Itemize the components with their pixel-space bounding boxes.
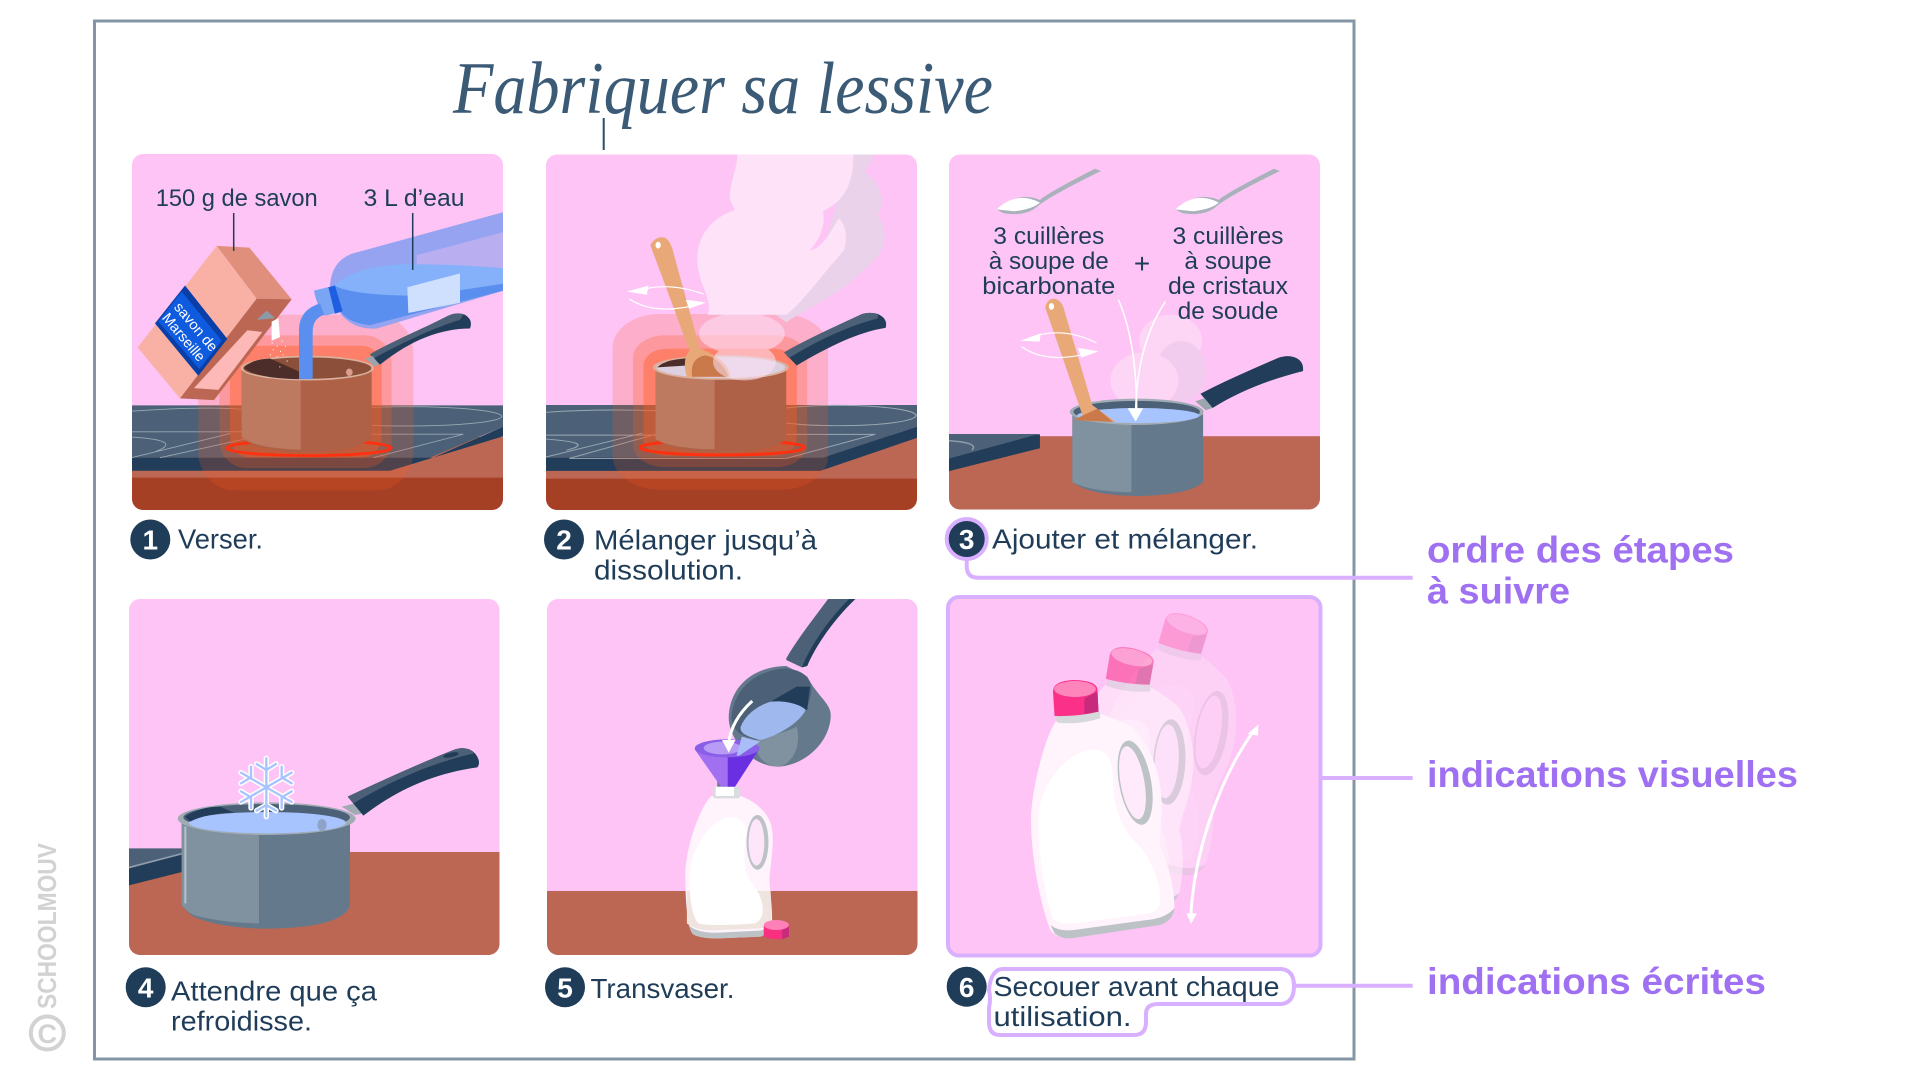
saucepan: grey <box>1070 356 1303 496</box>
watermark: SCHOOLMOUV <box>31 843 64 1050</box>
worktop and hob <box>946 434 1322 511</box>
legend: ordre des etapes: ordre des étapes <box>1427 530 1734 571</box>
label: 150 g de savon: 150 g de savon <box>156 185 318 212</box>
label: bicarbonate: 3 cuillères <box>993 223 1104 250</box>
heat halos <box>198 315 413 490</box>
worktop <box>543 891 922 958</box>
icon: snowflake <box>241 758 292 817</box>
step 3 caption with highlight <box>947 519 1413 578</box>
legend: ordre des etapes <box>1427 530 1734 611</box>
box label text: Marseille <box>158 310 208 365</box>
converging arrows <box>1118 300 1165 420</box>
step 1 caption <box>130 520 263 560</box>
step 1 caption: Verser. <box>178 524 263 554</box>
label: 3 L d'eau: 3 L d’eau <box>364 185 464 212</box>
title: Fabriquer sa lessive <box>452 48 993 130</box>
hob ring <box>227 440 391 456</box>
label: cristaux de soude: 3 cuillères <box>1172 223 1284 250</box>
worktop and hob <box>540 405 922 514</box>
arrow <box>722 701 752 753</box>
plus sign: + <box>1134 248 1150 279</box>
box label text: savon de <box>170 300 220 355</box>
bottle of water <box>314 212 503 329</box>
step 2 caption: Mélanger jusqu’à <box>594 524 817 556</box>
saucepan: copper <box>653 313 886 453</box>
box of soap <box>138 246 292 400</box>
wooden spoon <box>1045 299 1116 422</box>
step 2 caption: 2 <box>556 524 572 556</box>
step 2 caption <box>544 520 817 586</box>
label: cristaux de soude: de soude <box>1178 298 1278 325</box>
step 5 caption <box>545 967 734 1007</box>
step 2 caption: dissolution. <box>594 554 743 586</box>
panel: step 2 <box>540 154 922 514</box>
step 6 caption with highlight: utilisation. <box>994 1001 1132 1032</box>
label: cristaux de soude: de cristaux <box>1168 273 1288 300</box>
front bottle <box>1031 680 1174 938</box>
legend: indications ecrites: indications écrites <box>1427 961 1766 1002</box>
rotation arrows <box>1022 333 1096 358</box>
label: bicarbonate: à soupe de <box>989 248 1109 275</box>
step 4 caption <box>126 967 377 1036</box>
cap <box>764 920 789 939</box>
step 1 caption: 1 <box>143 524 158 556</box>
steam <box>697 154 885 381</box>
label: bicarbonate: bicarbonate <box>982 273 1115 300</box>
label: cristaux de soude <box>1168 223 1288 325</box>
step 5 caption: Transvaser. <box>590 973 734 1004</box>
double arrow <box>1186 724 1259 924</box>
step 3 caption with highlight: Ajouter et mélanger. <box>992 524 1258 554</box>
heat halos <box>613 314 828 490</box>
saucepan: copper <box>241 313 471 452</box>
label: 3 L d'eau <box>364 185 464 270</box>
label: bicarbonate <box>982 223 1115 300</box>
worktop and hob <box>130 405 507 516</box>
box label text <box>162 304 216 361</box>
watermark: SCHOOLMOUV: C <box>38 1019 57 1049</box>
middle bottle <box>1098 647 1194 901</box>
wooden spoon <box>650 237 730 377</box>
label: cristaux de soude: à soupe <box>1184 248 1272 275</box>
hob ring <box>640 440 805 455</box>
panel: step 6 <box>948 597 1320 956</box>
step 6 caption with highlight <box>947 967 1413 1035</box>
saucepan: grey <box>178 748 479 929</box>
panel: step 3 <box>946 154 1322 511</box>
step 5 caption: 5 <box>557 972 573 1004</box>
panel: step 5 <box>543 599 922 958</box>
step 4 caption: Attendre que ça <box>171 976 377 1006</box>
legend: indications visuelles: indications visuelles <box>1427 754 1798 795</box>
step 4 caption: refroidisse. <box>171 1006 312 1036</box>
outer frame <box>94 21 1354 1059</box>
funnel <box>695 737 760 787</box>
panel: step 4 <box>127 599 502 957</box>
bottle <box>685 780 773 938</box>
steam <box>1111 315 1206 409</box>
worktop and hob <box>127 848 502 957</box>
step 6 caption with highlight: 6 <box>959 972 974 1003</box>
step 3 caption with highlight: 3 <box>959 524 974 555</box>
rotation arrows <box>629 287 704 309</box>
saucepan pouring <box>729 599 855 767</box>
spoons <box>997 169 1280 214</box>
back bottle <box>1150 613 1236 876</box>
legend: ordre des etapes: à suivre <box>1427 570 1570 611</box>
panel: step 1 <box>130 154 507 516</box>
step 4 caption: 4 <box>138 972 154 1004</box>
stream of water <box>299 303 324 379</box>
watermark: SCHOOLMOUV: SCHOOLMOUV <box>34 843 62 1009</box>
step 6 caption with highlight: Secouer avant chaque <box>994 971 1280 1002</box>
